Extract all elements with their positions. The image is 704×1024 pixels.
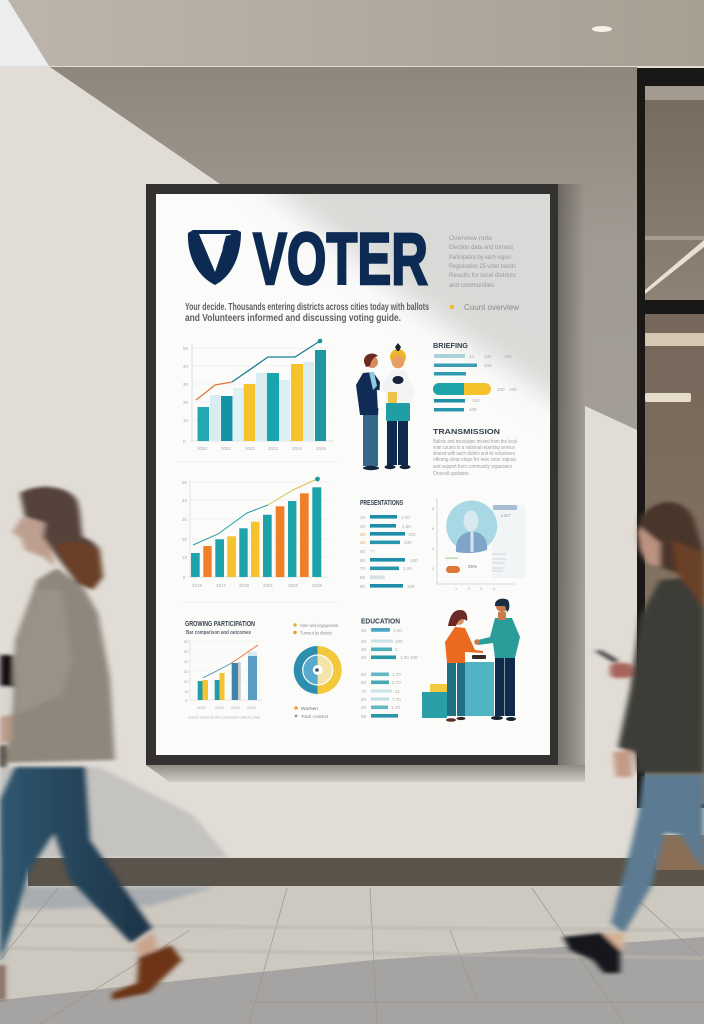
text block: transmission: Ballots and messages moved from the local (433, 439, 517, 445)
bar chart: turnout with trend line: 2022 (245, 446, 256, 451)
panel: voter profile card: 4 (432, 546, 435, 551)
panel: voter profile card: 6 (432, 526, 435, 531)
baseboard (28, 858, 704, 886)
panel: presentations bars: 40 (360, 540, 366, 545)
panel: presentations bars: 60 (360, 558, 366, 563)
bar chart: turnout with trend line (183, 339, 334, 451)
panel: presentations bars: 10 (360, 515, 366, 520)
bar chart: turnout with trend line: 2024 (292, 446, 303, 451)
panel: education bars (361, 618, 418, 719)
bar chart: turnout with trend line: 20 (183, 400, 189, 405)
panel: small comparison chart: 2023 (231, 705, 241, 710)
panel: presentations bars: 100 (410, 558, 418, 563)
panel: briefing bars: 100 (472, 398, 480, 403)
bar chart: annual growth: 50 (182, 480, 188, 485)
bar chart: annual growth: 2019 (239, 583, 250, 588)
panel: briefing bars: 100 (469, 407, 477, 412)
panel: presentations bars: 100 (408, 532, 416, 537)
donut chart: Total context (301, 714, 329, 719)
panel: education bars: 2.70 (392, 680, 401, 685)
bar chart: annual growth: 30 (182, 517, 188, 522)
glazed door (637, 68, 704, 808)
panel: voter profile card (432, 498, 525, 591)
bar chart: annual growth: 2017 (216, 583, 227, 588)
skylight (0, 0, 49, 66)
panel: education bars: EDUCATION (361, 618, 400, 626)
panel: education bars: 95 (361, 714, 367, 719)
panel: education bars: 90 (361, 705, 367, 710)
panel: small comparison chart: GROWING PARTICIPATION (185, 621, 255, 628)
legend: key: Count overview (464, 303, 519, 312)
illustration: two people with a laptop (356, 343, 415, 470)
text block: transmission: and support from community organisers (433, 464, 512, 470)
panel: small comparison chart: 2021 (197, 705, 207, 710)
person: walking woman with phone on right (563, 502, 704, 973)
donut chart: Women (301, 706, 319, 711)
panel: presentations bars: 90 (360, 584, 366, 589)
panel: briefing bars (433, 343, 517, 412)
panel: presentations bars: 1.00 (402, 524, 411, 529)
bar chart: turnout with trend line: 2020 (197, 446, 208, 451)
panel: voter profile card: 25% (468, 564, 477, 569)
donut chart: Voter and engagement (300, 623, 339, 628)
title: VOTER (253, 219, 428, 300)
ceiling spotlight (592, 26, 612, 32)
intro note: Election data and turnout (449, 244, 513, 251)
bar chart: annual growth: 20 (182, 537, 188, 542)
logo shield (188, 230, 241, 285)
panel: voter profile card: LIST (501, 513, 511, 518)
panel: education bars: 10 (361, 628, 367, 633)
bar chart: annual growth: 2021 (263, 583, 274, 588)
bar chart: annual growth: 2023 (288, 583, 299, 588)
panel: small comparison chart: Bar comparison and outcomes (186, 630, 251, 636)
bar chart: annual growth: 40 (182, 498, 188, 503)
panel: education bars: 80 (361, 697, 367, 702)
panel: voter profile card: 3 (480, 586, 483, 591)
floor (0, 886, 704, 1024)
panel: presentations bars: 20 (360, 524, 366, 529)
shadow beside the frame (558, 184, 585, 782)
panel: education bars: 1.00 (393, 628, 402, 633)
illustration: voters at a counter (422, 599, 520, 722)
poster frame (146, 184, 558, 765)
ceiling (0, 0, 704, 66)
panel: small comparison chart: 60 (184, 639, 189, 644)
panel: education bars: 1.70 (392, 672, 401, 677)
donut chart (293, 623, 342, 719)
intro note: Results for local districts (449, 272, 517, 279)
panel: briefing bars: 200 (497, 387, 505, 392)
panel: education bars: 50 (361, 672, 367, 677)
panel: briefing bars: BRIEFING (433, 343, 469, 350)
door base seen behind walker (656, 835, 704, 870)
panel: briefing bars: 100 (484, 354, 492, 359)
panel: presentations bars: 50 (360, 549, 366, 554)
lower wall shadow (0, 767, 229, 858)
panel: education bars: 100 (395, 639, 403, 644)
panel: education bars: 70 (361, 689, 367, 694)
panel: voter profile card: 1 (455, 586, 458, 591)
panel: presentations bars: 80 (360, 575, 366, 580)
panel: small comparison chart: 40 (184, 659, 189, 664)
panel: small comparison chart: 20 (184, 679, 189, 684)
bar chart: turnout with trend line: 0 (183, 439, 186, 444)
text block: transmission: TRANSMISSION (433, 429, 500, 436)
text block: transmission: Overall updates. (433, 471, 470, 477)
panel: education bars: 60 (361, 680, 367, 685)
panel: briefing bars: 100 (504, 354, 512, 359)
intro note (449, 235, 517, 289)
intro note: Registration 25 voter trends (449, 263, 517, 270)
subtitle: Your decide. Thousands entering districts across cities today with ballots (185, 302, 429, 313)
panel: presentations bars (360, 500, 418, 589)
panel: education bars: 1.70 (391, 705, 400, 710)
intro note: Participation by each region (449, 254, 511, 261)
bar chart: turnout with trend line: 50 (183, 346, 189, 351)
panel: education bars: 21 (395, 689, 401, 694)
panel: education bars: 30 (361, 647, 367, 652)
bar chart: turnout with trend line: 10 (183, 418, 189, 423)
panel: education bars: 40 (361, 655, 367, 660)
panel: presentations bars: 1.00 (401, 515, 410, 520)
panel: small comparison chart: 50 (184, 649, 189, 654)
bar chart: turnout with trend line: 2025 (316, 446, 327, 451)
wall (0, 66, 704, 866)
subtitle (185, 302, 429, 324)
panel: small comparison chart: 0 (185, 698, 188, 703)
panel: voter profile card: 4 (493, 586, 496, 591)
text block: transmission: offering clear steps for new voter signup (433, 457, 516, 463)
bar chart: annual growth: 0 (183, 575, 186, 580)
bar chart: annual growth: 2015 (192, 583, 203, 588)
bar chart: turnout with trend line: 2021 (221, 446, 232, 451)
panel: small comparison chart: 10 (184, 689, 189, 694)
intro note: Overview note (449, 235, 492, 242)
bar chart: annual growth (182, 477, 330, 588)
panel: education bars: 1.00 100 (400, 655, 418, 660)
panel: voter profile card: 8 (432, 506, 435, 511)
panel: briefing bars: 100 (509, 387, 517, 392)
panel: education bars: 1 (395, 647, 398, 652)
panel: small comparison chart: 2024 (247, 705, 257, 710)
panel: presentations bars: 100 (407, 584, 415, 589)
panel: presentations bars: 1.00 (403, 566, 412, 571)
panel: education bars: 7.70 (392, 697, 401, 702)
intro note: and communities (449, 282, 495, 289)
panel: voter profile card: 2 (468, 586, 471, 591)
person: walking woman on left (0, 487, 182, 1000)
bar chart: turnout with trend line: 2023 (268, 446, 279, 451)
panel: presentations bars: PRESENTATIONS (360, 500, 403, 507)
panel: small comparison chart: 2022 (215, 705, 225, 710)
text block: transmission: vote counts to a national reporting service (433, 445, 515, 451)
panel: small comparison chart: Source notes for the comparison data in chart (188, 714, 261, 720)
panel: briefing bars: 100 (484, 363, 492, 368)
panel: small comparison chart: 30 (184, 669, 189, 674)
poster light gradient (266, 194, 550, 408)
bar chart: turnout with trend line: 40 (183, 364, 189, 369)
panel: education bars: 20 (361, 639, 367, 644)
subtitle: and Volunteers informed and discussing voting guide. (185, 313, 401, 324)
panel: presentations bars: 100 (404, 540, 412, 545)
panel: voter profile card: 2 (432, 566, 435, 571)
donut chart: Turnout by district (300, 630, 333, 636)
text block: transmission: shared with each district and its volunteers (433, 451, 515, 457)
panel: briefing bars: 44 (469, 354, 475, 359)
wall shadow from ceiling (50, 67, 637, 782)
panel: presentations bars: 70 (360, 566, 366, 571)
text block: transmission (433, 429, 517, 477)
bar chart: annual growth: 2025 (312, 583, 323, 588)
bar chart: annual growth: 10 (182, 555, 188, 560)
shadow below the frame (146, 765, 585, 782)
panel: small comparison chart (184, 621, 262, 720)
panel: presentations bars: 30 (360, 532, 366, 537)
bar chart: turnout with trend line: 30 (183, 382, 189, 387)
